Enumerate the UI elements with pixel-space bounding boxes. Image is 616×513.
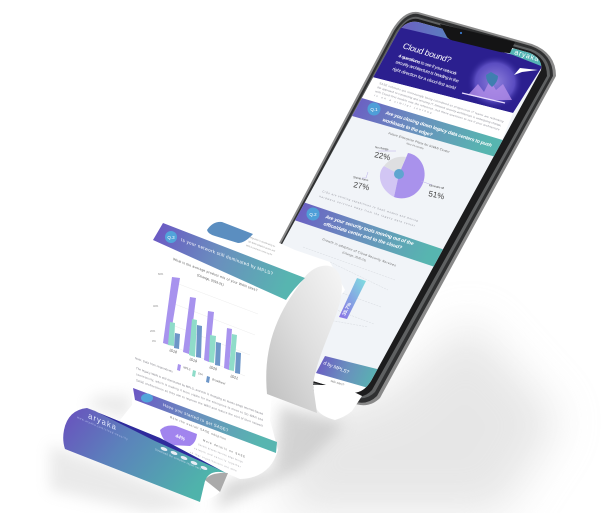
bar chart: MPLS, DIA, Broadband: 60% xyxy=(158,272,164,276)
legend: Broadband xyxy=(212,377,226,386)
pie chart: Future Enterprise Plans for SWAN Center xyxy=(388,131,451,154)
pie labels: 22% xyxy=(374,150,391,162)
bar chart: MPLS, DIA, Broadband: 20% xyxy=(150,329,156,333)
top card remnants: Migration is accelerating as xyxy=(250,236,276,248)
Q2 band: Q.2 xyxy=(309,212,317,217)
Q4 band on paper: Have you started to get SASE? xyxy=(163,402,229,433)
bar chart: MPLS, DIA, Broadband: 2019 xyxy=(189,357,198,363)
globe illustration xyxy=(462,58,538,106)
Q2 band xyxy=(295,202,443,266)
Q3 band on paper: Is your network still dominated by MPLS? xyxy=(181,237,274,276)
notch xyxy=(440,24,515,53)
bar chart: cloud security: 35.7% xyxy=(341,301,353,317)
bar chart: cloud security: Growth in adoption of Cloud Security Services xyxy=(322,237,397,268)
logo tab: aryaka xyxy=(513,49,539,63)
headline text: 4 questions to see if your network xyxy=(398,53,459,76)
intro text: is on a similar journey xyxy=(374,93,433,115)
body text on paper: Note: Data from respondents xyxy=(135,356,173,374)
Q4 content: Secure access service edge brings xyxy=(198,443,244,464)
bar chart: MPLS, DIA, Broadband: 0% xyxy=(152,339,156,343)
body text on paper: connectivity, which is making it more viable for the enterprise to move to SD-WAN and xyxy=(136,372,264,422)
footer text: Download the complete report here xyxy=(155,447,202,471)
headline text xyxy=(392,41,460,91)
logo tab xyxy=(508,48,542,66)
bar chart: MPLS, DIA, Broadband: 2018 xyxy=(169,348,178,354)
paper: unrolled infographic sheet xyxy=(120,205,345,479)
bar chart: cloud security: (Change, 2020-21) xyxy=(342,250,367,262)
legend: MPLS xyxy=(183,365,191,372)
phone xyxy=(279,12,556,420)
Q1 band: Q.1 xyxy=(370,107,378,112)
social icons xyxy=(160,446,208,471)
purple stat card: 44% xyxy=(174,433,186,443)
intro text: with Cloud-first models now the reference. Ask these questions to see if your architecture xyxy=(375,89,501,132)
Q4 content: Rate the overall SASE adoption xyxy=(170,415,226,441)
chart title: What is the average product mix of your WAN sites? xyxy=(173,257,258,293)
soft shadows xyxy=(50,320,560,513)
header: dark panel xyxy=(372,27,545,113)
pie labels: Eliminate all xyxy=(429,183,445,190)
legend: DIA xyxy=(198,371,204,377)
top card remnants: MPLS contracts come up for xyxy=(246,244,273,256)
screen xyxy=(282,22,542,392)
Q4 content: so that organizations are able xyxy=(190,451,237,473)
curl back xyxy=(203,473,228,492)
Q1 footnote: CIOs are shifting capabilities to SaaS models and moving xyxy=(322,189,419,223)
body text on paper xyxy=(135,356,264,428)
bar chart: cloud security xyxy=(300,237,397,327)
intro text: SASE solutions are increasingly being considered as progressive IT teams are rethinking xyxy=(379,81,505,124)
pie chart: Next 24 months xyxy=(406,141,425,150)
Q1 band xyxy=(352,98,503,156)
headline text: right direction for a cloud-first world xyxy=(392,66,457,91)
intro section xyxy=(355,77,513,140)
paper sheet xyxy=(120,205,345,479)
Q3 lower white section xyxy=(314,374,368,392)
Q2 band: office/data center and to the cloud? xyxy=(322,221,403,251)
Q1 band: Are you closing down legacy data centers to push xyxy=(384,110,493,149)
tagline: www.aryaka.com/cloud-security xyxy=(77,415,128,441)
pie labels: 27% xyxy=(353,180,370,192)
Q1 band: workloads to the edge? xyxy=(380,117,433,138)
curl white xyxy=(200,480,220,502)
top card remnants: SD-WAN adoption grows and xyxy=(248,240,276,253)
Q3 band on phone: d by MPLS? xyxy=(322,360,350,376)
bar chart: MPLS, DIA, Broadband: 40% xyxy=(153,304,159,308)
Q4 band on paper xyxy=(133,388,277,453)
Q4 content xyxy=(160,415,245,473)
cover gradient xyxy=(63,408,226,502)
top card remnants xyxy=(207,222,276,256)
pie labels: 51% xyxy=(428,189,445,201)
Q2 band: Are your security tools moving out of the xyxy=(324,214,415,247)
Q3 band on phone: side sites? xyxy=(330,379,345,387)
header: top strip xyxy=(398,22,448,39)
legend xyxy=(177,364,226,386)
intro text: the approach to connecting and securing IT. Network security architecture is undergoing change, xyxy=(377,85,503,127)
dark edge xyxy=(87,408,226,473)
Q1 footnote: hardware services away from the legacy data center xyxy=(319,194,416,228)
phone frame xyxy=(216,12,556,405)
body text on paper: The legacy WAN is still dominated by MPLS, and this is changing as teams adopt internet-based xyxy=(136,366,264,416)
pie labels: Shrink some xyxy=(353,175,369,182)
logo: aryaka xyxy=(88,411,117,432)
Q3 band on paper: Q.3 xyxy=(167,235,175,240)
Q4 content: More details on SASE xyxy=(203,438,245,459)
pie labels: No change xyxy=(375,145,389,151)
pie chart xyxy=(362,131,451,198)
bottom roll: coloured cover xyxy=(63,408,228,502)
headline text: security architecture is heading in the xyxy=(395,59,460,84)
bar chart: MPLS, DIA, Broadband xyxy=(150,272,258,386)
pie labels xyxy=(353,145,445,201)
Q4 content: network and security together xyxy=(194,447,241,469)
Q3 band on paper xyxy=(153,223,305,300)
bar chart: MPLS, DIA, Broadband: 2021 xyxy=(230,374,239,380)
body text on paper: SASE architectures as they aim to improve the WAN and reduce the cost of their network xyxy=(136,378,264,428)
chart title: (Change, 2019-21) xyxy=(197,273,224,287)
roll inside xyxy=(266,266,342,413)
headline text: Cloud bound? xyxy=(401,41,454,65)
paper back lower blob xyxy=(313,385,362,420)
bar chart: MPLS, DIA, Broadband: 2020 xyxy=(209,365,218,371)
Q3 band on phone xyxy=(316,356,378,388)
